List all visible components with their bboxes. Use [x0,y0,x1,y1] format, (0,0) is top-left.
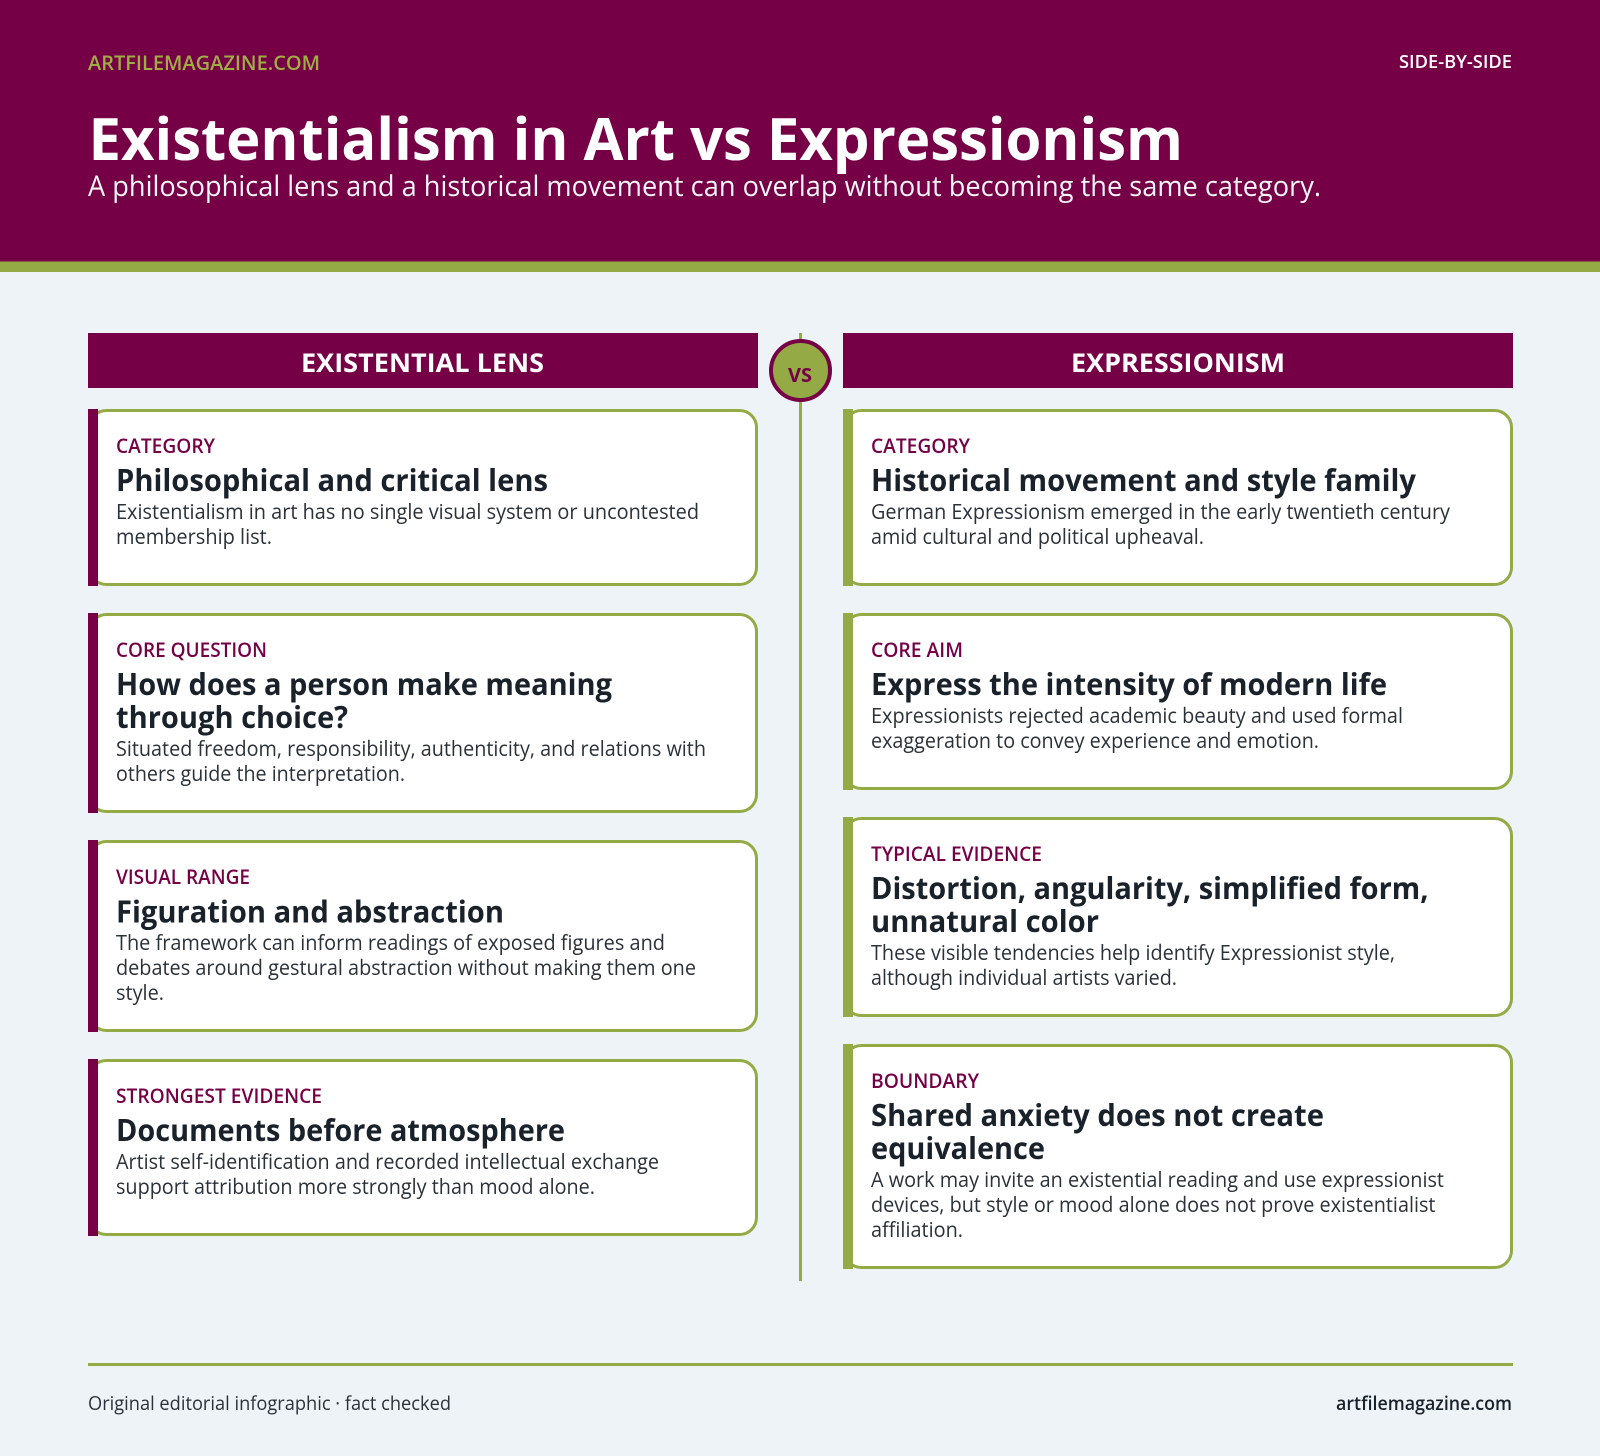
card: category: Historical movement and style family [871,459,1417,500]
card: core aim: exaggeration to convey experience and emotion. [871,727,1319,755]
card: typical evidence [843,817,1512,1017]
VS badge: VS [788,361,812,388]
card: strongest evidence: support attribution more strongly than mood alone. [116,1173,595,1201]
card: category: Philosophical and critical lens [116,459,548,500]
column heading: expressionism: EXPRESSIONISM [1071,344,1285,380]
panel: existential lens [88,333,758,1236]
card: visual range: debates around gestural abstraction without making them one [116,954,696,982]
title: Existentialism in Art vs Expressionism [88,98,1183,177]
card: boundary: BOUNDARY [871,1067,979,1094]
site name: ARTFILEMAGAZINE.COM [88,49,320,76]
card: core question: through choice? [116,696,348,737]
card: category: Existentialism in art has no single visual system or uncontested [116,498,699,526]
footer site name: artfilemagazine.com [1336,1390,1512,1416]
card: core aim: Expressionists rejected academic beauty and used formal [871,702,1403,730]
card: category: membership list. [116,523,272,551]
subtitle: A philosophical lens and a historical movement can overlap without becoming the same category. [88,167,1321,205]
card: strongest evidence: STRONGEST EVIDENCE [116,1082,322,1109]
card: boundary [843,1044,1512,1269]
card: boundary: equivalence [871,1127,1045,1168]
card: visual range: VISUAL RANGE [116,863,250,890]
card: typical evidence: TYPICAL EVIDENCE [871,840,1042,867]
card: typical evidence: These visible tendencies help identify Expressionist style, [871,939,1395,967]
header banner [0,0,1600,272]
card: typical evidence: unnatural color [871,900,1099,941]
card: visual range [88,840,756,1032]
card: strongest evidence: Documents before atmosphere [116,1109,565,1150]
card: visual range: Figuration and abstraction [116,890,504,932]
card: visual range: style. [116,979,164,1007]
card: core question: Situated freedom, responsibility, authenticity, and relations with [116,735,706,763]
card: boundary: affiliation. [871,1216,963,1244]
format tag: SIDE-BY-SIDE [1399,50,1512,74]
VS badge [771,341,830,400]
column heading: existential lens [88,333,758,388]
card: category: CATEGORY [116,432,215,459]
card: core aim: Express the intensity of modern life [871,663,1387,704]
card: typical evidence: although individual artists varied. [871,964,1177,992]
card: strongest evidence: Artist self-identification and recorded intellectual exchange [116,1148,659,1176]
center divider with VS badge [771,333,830,1281]
card: category [843,409,1512,586]
card: core question: others guide the interpretation. [116,760,405,788]
card: core question: CORE QUESTION [116,636,267,663]
column heading: expressionism [843,333,1513,388]
card: boundary: devices, but style or mood alone does not prove existentialist [871,1191,1436,1219]
card: core aim [843,613,1512,790]
column heading: existential lens: EXISTENTIAL LENS [301,344,544,380]
footer [88,1363,1513,1416]
footer note: Original editorial infographic · fact checked [88,1390,451,1416]
card: category: CATEGORY [871,432,970,459]
card: core question: How does a person make meaning [116,663,612,704]
card: boundary: Shared anxiety does not create [871,1094,1324,1135]
card: category: amid cultural and political upheaval. [871,523,1204,551]
card: core question [88,613,756,813]
card: typical evidence: Distortion, angularity, simplified form, [871,867,1428,908]
card: category: German Expressionism emerged in the early twentieth century [871,498,1451,526]
panel: expressionism [843,333,1513,1269]
card: visual range: The framework can inform readings of exposed figures and [116,929,665,957]
card: core aim: CORE AIM [871,636,963,663]
card: category [88,409,756,586]
card: boundary: A work may invite an existential reading and use expressionist [871,1166,1444,1194]
card: strongest evidence [88,1059,756,1236]
